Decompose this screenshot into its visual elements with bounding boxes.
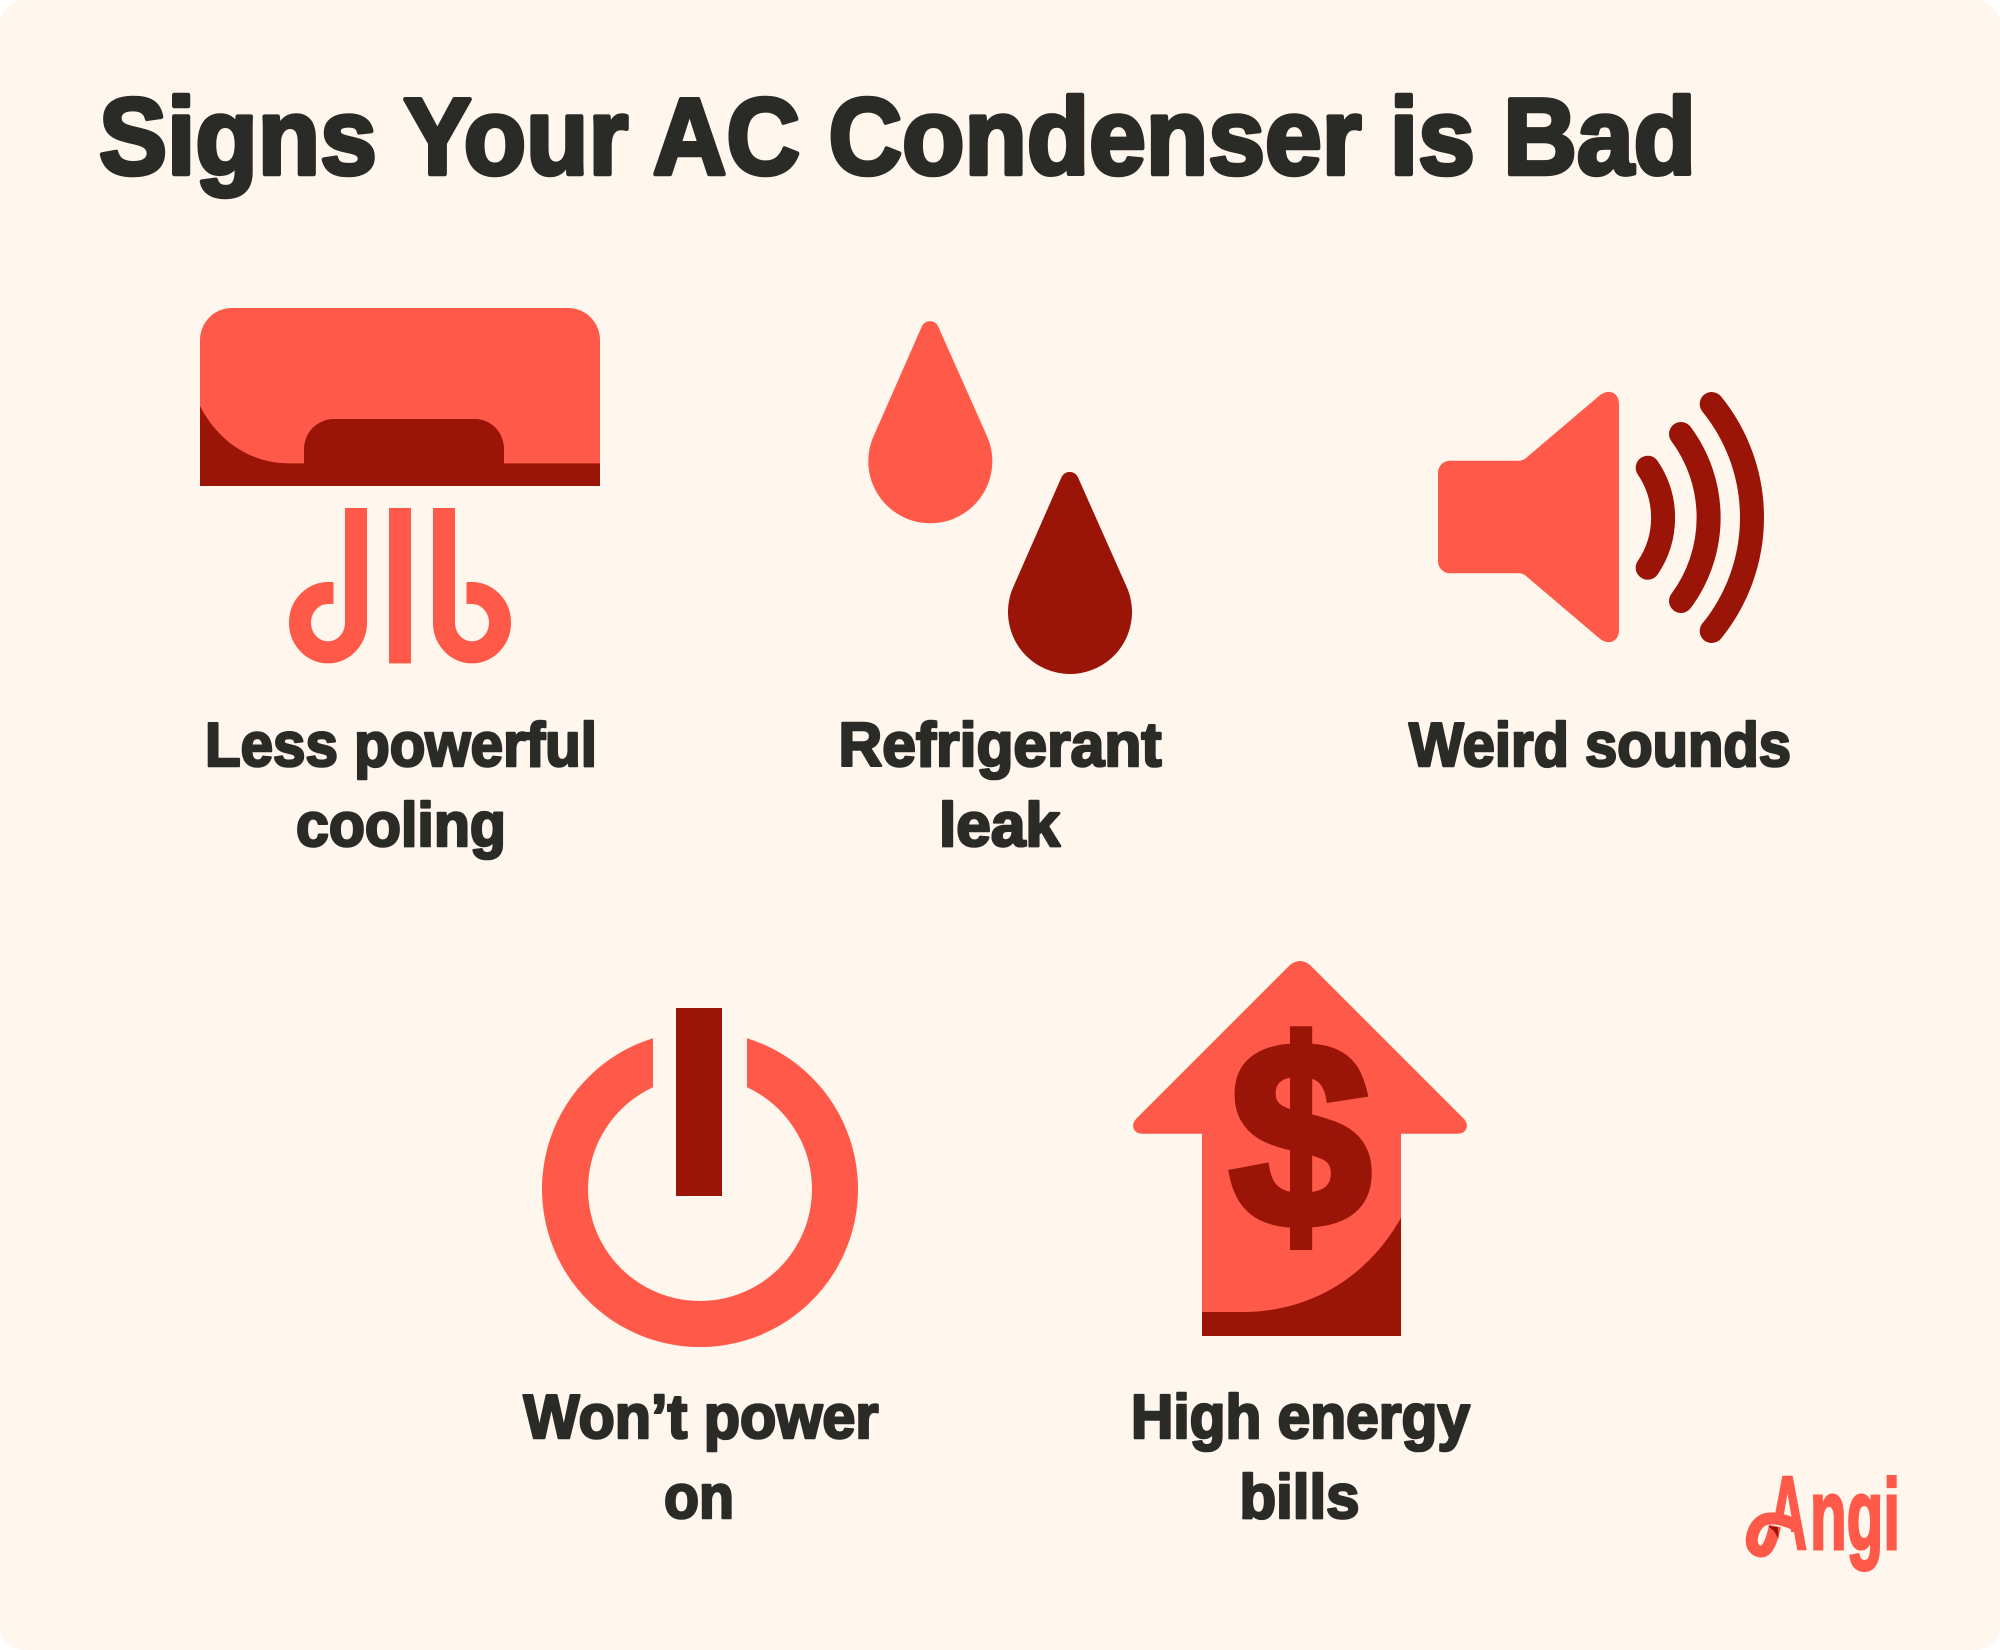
label: less powerful cooling: Less powerful	[205, 711, 597, 780]
label: refrigerant leak: Refrigerant	[838, 711, 1162, 780]
label: less powerful cooling	[205, 711, 597, 860]
label: high energy bills: bills	[1240, 1463, 1360, 1532]
label: high energy bills: High energy	[1131, 1383, 1470, 1452]
label: won't power on: on	[664, 1463, 734, 1532]
label: weird sounds: Weird sounds	[1409, 711, 1791, 780]
label: won't power on: Won’t power	[524, 1383, 878, 1452]
icon: up arrow with dollar sign	[1133, 961, 1467, 1336]
label: less powerful cooling: cooling	[296, 791, 506, 860]
icon: up arrow with dollar sign: $	[1230, 988, 1371, 1282]
logo: Angi	[1746, 1475, 1897, 1572]
label: high energy bills	[1131, 1383, 1470, 1532]
label: refrigerant leak	[838, 711, 1162, 860]
label: refrigerant leak: leak	[939, 791, 1061, 860]
icon: refrigerant drops	[868, 321, 1132, 674]
logo: Angi: ngi	[1810, 1459, 1900, 1571]
icon: speaker with sound waves	[1438, 392, 1752, 642]
icon: air conditioner with airflow	[200, 308, 600, 663]
label: won't power on	[524, 1383, 878, 1532]
icon: power symbol	[542, 1008, 858, 1347]
title: Signs Your AC Condenser is Bad	[99, 76, 1696, 198]
logo: Angi: A	[1768, 1456, 1807, 1572]
